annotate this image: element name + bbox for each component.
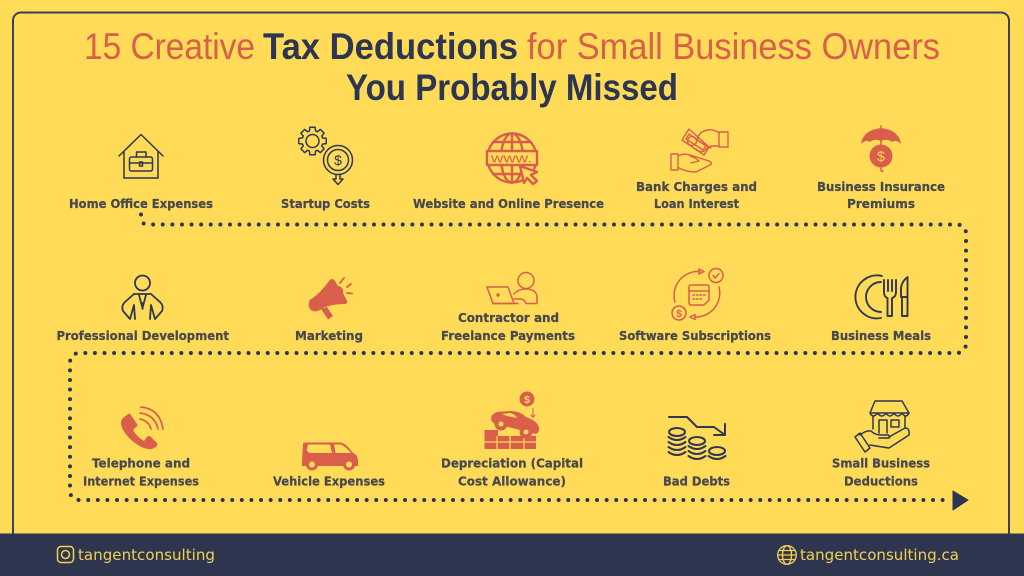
label: Professional Development [56,328,229,343]
dotted path [70,214,966,500]
label: Marketing [295,328,363,343]
icon: phone with signal [121,407,163,449]
icon: van [302,442,358,470]
icon: car on falling bricks with coin: $ [524,394,530,406]
label: Website and Online Presence [413,196,604,211]
icon: calendar with cycle arrows [672,268,723,320]
label line 2: Cost Allowance) [458,474,566,488]
label: Telephone and [92,456,190,470]
arrow head [953,491,968,510]
title: for Small Business Owners [527,26,940,67]
item: Startup Costs [281,127,370,211]
dollar sign: $ [334,152,342,168]
label line 2: Premiums [847,196,915,211]
label: Depreciation (Capital [441,456,583,470]
label line 2: Internet Expenses [83,474,199,488]
icon: laptop and person [487,272,537,304]
icon: shop on a hand [855,401,909,452]
title [84,26,940,108]
icon: house with briefcase [119,134,163,178]
label: Bad Debts [663,474,730,488]
website: tangentconsulting.ca [800,546,959,564]
icon: umbrella over coin: $ [877,148,885,164]
item: Telephone and Internet Expenses [83,407,199,488]
icon: globe with cursor [487,134,537,184]
item: Depreciation (Capital Cost Allowance) [441,392,583,488]
item: Business Insurance Premiums [817,126,945,211]
title: You Probably Missed [346,67,678,108]
label: Vehicle Expenses [273,474,385,488]
instagram handle: tangentconsulting [78,546,215,564]
icon: person with tie [122,276,163,319]
label: Software Subscriptions [619,328,771,343]
item: Bad Debts [663,417,730,488]
icon: gear and coin [299,127,352,184]
label line 2: Freelance Payments [441,328,575,343]
icon: coins and falling arrow [668,417,726,459]
icon: car on falling bricks with coin [484,392,539,449]
icon: megaphone [309,278,352,320]
item: Bank Charges and Loan Interest [636,129,757,211]
item: Website and Online Presence [413,134,604,211]
item: Professional Development [56,276,229,343]
item: Contractor and Freelance Payments [441,272,575,343]
label: Business Insurance [817,179,945,194]
www text: www. [490,150,532,166]
item: Marketing [295,278,363,343]
item: Small Business Deductions [832,401,930,488]
item: Business Meals [831,275,931,343]
footer bar [0,534,1024,576]
label: Contractor and [458,310,559,325]
icon: instagram [58,546,74,562]
item: Home Office Expenses [69,134,213,211]
label: Bank Charges and [636,179,757,194]
label line 2: Loan Interest [654,196,739,211]
item: Software Subscriptions [619,268,771,343]
label: Home Office Expenses [69,196,213,211]
label line 2: Deductions [844,474,918,488]
dollar sign: $ [676,309,682,320]
icon: plate, fork and knife [855,275,908,318]
icon: globe [778,546,796,564]
icon: hands exchanging money [671,129,728,172]
label: Business Meals [831,328,931,343]
title: 15 Creative [84,26,255,67]
item: Vehicle Expenses [273,442,385,488]
label: Small Business [832,456,930,470]
label: Startup Costs [281,196,370,211]
title: Tax Deductions [263,26,518,67]
